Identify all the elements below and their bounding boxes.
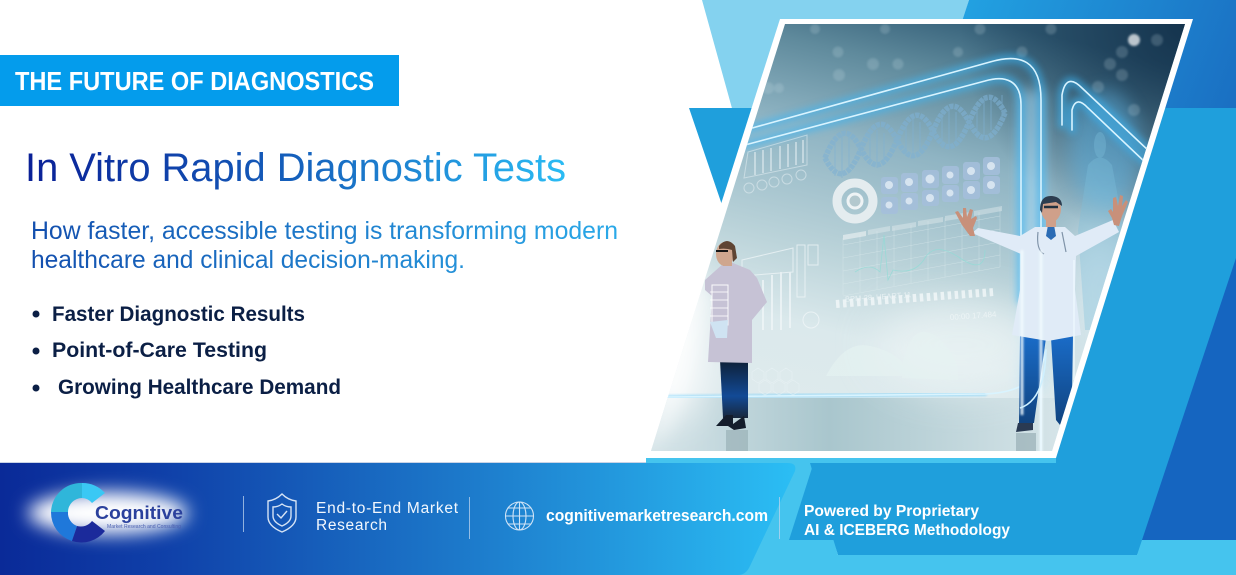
heart-rate chart: [843, 208, 1000, 296]
subtitle text block: How faster, accessible testing is transforming modern: [31, 217, 618, 245]
background geometric shapes: [646, 0, 1236, 575]
right doctor tie and stethoscope: [1046, 227, 1056, 240]
right doctor head: [1041, 196, 1061, 222]
vertical light beams over coat: [1022, 250, 1041, 452]
text: website: cognitivemarketresearch.com: [546, 506, 768, 525]
right doctor shoes: [1016, 423, 1033, 432]
logo: Cognitive: Cognitive: [95, 502, 183, 523]
subtitle text block: [31, 217, 618, 274]
control panel bars: [744, 135, 807, 193]
photo white frame: [640, 19, 1193, 458]
banner: section label: THE FUTURE OF DIAGNOSTICS: [15, 66, 374, 96]
photo panel: doctors with holographic screen: [640, 19, 1200, 458]
neon glow lines: [665, 59, 1150, 455]
right doctor hands: [955, 195, 1128, 236]
text: methodology: Powered by Proprietary: [804, 503, 979, 520]
footer band: [0, 462, 1010, 575]
text: end-to-end: [316, 500, 459, 534]
chart labels: HEART-11: [876, 290, 911, 302]
left doctor head: [716, 242, 734, 266]
glow band between neon columns: [1020, 90, 1044, 390]
text: end-to-end: Research: [316, 517, 387, 534]
icon: organ tile grid: [881, 157, 1000, 214]
bullet list: Growing Healthcare Demand: [58, 376, 341, 399]
left doctor trousers: [720, 360, 748, 418]
bullet list: Faster Diagnostic Results: [52, 303, 305, 326]
banner: section label: [0, 55, 399, 106]
bokeh dots: [762, 24, 1163, 116]
chevrons: [836, 292, 994, 304]
person: left doctor: [705, 241, 767, 451]
holographic body figure: [1078, 132, 1124, 330]
bullet list: Point-of-Care Testing: [52, 339, 267, 362]
floor: [640, 398, 1060, 453]
icon: organ glyphs: [885, 162, 995, 208]
bullet list: [32, 303, 341, 399]
logo: Cognitive: Market Research and Consulting: [107, 524, 181, 530]
text: methodology: [804, 503, 1010, 539]
icon: shield: [268, 494, 296, 532]
left doctor shoes: [716, 415, 746, 430]
right doctor reflection: [1016, 433, 1036, 451]
scale bar row: [843, 206, 1002, 240]
title: In Vitro Rapid Diagnostic Tests: [25, 146, 566, 190]
logo: Cognitive: [28, 483, 188, 543]
logo ring segments: [51, 483, 105, 543]
person: right doctor: [955, 195, 1128, 452]
left doctor coat: [705, 263, 767, 363]
text: end-to-end: End-to-End Market: [316, 500, 459, 517]
right doctor coat: [972, 220, 1119, 341]
subtitle text block: healthcare and clinical decision-making.: [31, 246, 465, 274]
right doctor trousers: [1019, 335, 1073, 425]
readout: 00:00 17.484: [950, 310, 997, 322]
left readout gauges: [742, 245, 819, 330]
icon: dial: [837, 183, 873, 219]
bokeh highlight: [1128, 34, 1140, 46]
photo scene: [640, 20, 1200, 455]
open book hologram: [826, 332, 958, 380]
chart labels: [846, 292, 911, 302]
text: methodology: AI & ICEBERG Methodology: [804, 522, 1010, 539]
icon: globe: [506, 502, 534, 530]
chart labels: BPM-28: [845, 293, 872, 304]
left doctor reflection: [726, 430, 748, 451]
hexagon pattern: [762, 393, 796, 396]
icon: DNA helix: [825, 95, 1005, 178]
